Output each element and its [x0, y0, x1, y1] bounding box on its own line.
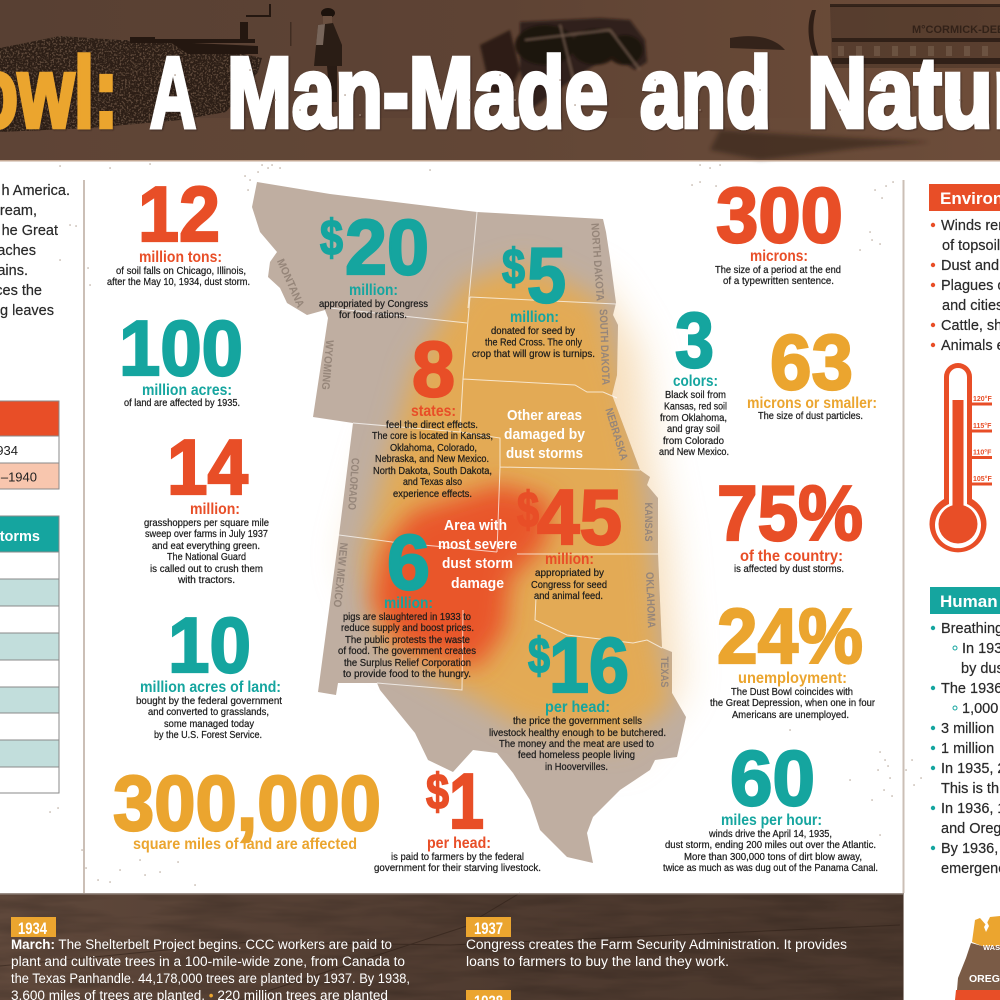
stat: 10 million acres of land: bought by the federal government: [136, 696, 282, 707]
map callout: severe area: most severe: [438, 536, 517, 553]
stat: 12 million tons: million tons:: [139, 249, 222, 266]
stat: 63 microns or smaller: microns or smaller:: [747, 395, 877, 412]
panel: human effects: 3 million: [941, 721, 994, 737]
stat: 60 miles per hour: twice as much as was dug out of the Panama Canal.: [663, 863, 878, 874]
stat: 63 microns or smaller: The size of dust particles.: [758, 411, 863, 422]
state labels: [274, 223, 670, 688]
map callout: other areas: dust storms: [506, 445, 583, 462]
stat: 14 million grasshoppers: sweep over farms in July 1937: [145, 529, 268, 540]
stat: $20 million: appropriated by Congress: [319, 299, 428, 310]
stat: 12 million tons: of soil falls on Chicago, Illinois,: [116, 266, 246, 277]
stat: $5 million: 5: [527, 231, 566, 319]
stat: 60 miles per hour: winds drive the April 14, 1935,: [708, 829, 832, 840]
timeline: 1934: [11, 917, 410, 1000]
header photo band: [0, 0, 1000, 162]
stat: 10 million acres of land: some managed today: [164, 719, 254, 730]
stat: 8 states: experience effects.: [393, 489, 472, 500]
timeline: 1937: [466, 917, 847, 969]
stat: $20 million: million:: [349, 282, 398, 299]
left intro text: ream,: [0, 203, 37, 219]
panel: environmental effects: of topsoil: [942, 238, 1000, 254]
timeline: 1934: 1934: [18, 919, 47, 938]
left intro text: he Great: [2, 223, 58, 239]
stat: 3 colors: Kansas, red soil: [664, 402, 727, 412]
stat: 75% of the country: 75%: [717, 469, 863, 557]
photo: seed drill machine: [710, 4, 1000, 160]
stat: $16 per head: [489, 621, 666, 773]
stat: 3 colors: and gray soil: [667, 424, 720, 435]
stat: $45 million: appropriated by: [535, 568, 604, 579]
map callout: other areas: damaged by: [504, 426, 586, 443]
stat: 14 million grasshoppers: 14: [167, 423, 248, 511]
table: dust storms: torms: [0, 529, 40, 545]
stat: 300,000 square miles: square miles of land are affected: [133, 836, 357, 853]
stat: 24% unemployment: 24%: [717, 592, 863, 680]
stat: $5 million: $: [502, 239, 525, 295]
stat: $16 per head: $: [528, 628, 550, 684]
stat: $5 million: the Red Cross. The only: [485, 338, 582, 348]
timeline: 1938: [466, 990, 511, 1000]
stat: 12 million tons: 12: [138, 170, 220, 258]
title: A: [150, 37, 196, 149]
stat: 3 colors: colors:: [673, 373, 718, 390]
icon: thermometer: 105°F: [973, 475, 992, 483]
map callout: other areas: Other areas: [507, 407, 582, 424]
stat: 3 colors: and New Mexico.: [659, 447, 729, 458]
stat: 6 million pigs: to provide food to the hungry.: [343, 669, 471, 680]
stat: 10 million acres of land: [136, 601, 282, 741]
map callout: severe area: damage: [451, 575, 504, 592]
stat: 300,000 square miles: 300,000: [113, 759, 381, 847]
stat: 8 states: [372, 325, 493, 500]
paper speckle texture: [50, 164, 935, 885]
stat: $1 per head: government for their starving livestock.: [374, 863, 541, 874]
icon: thermometer: 110°F: [973, 448, 992, 456]
state borders: [330, 212, 662, 690]
table: dust bowl years: –1940: [1, 470, 37, 484]
stat: $45 million: 45: [537, 473, 622, 561]
state labels: KANSAS: [642, 502, 654, 542]
stat: 300 microns: of a typewritten sentence.: [723, 276, 834, 287]
stat: 6 million pigs: the Surplus Relief Corporation: [344, 658, 471, 669]
state labels: NORTH DAKOTA: [588, 223, 606, 301]
stat: 24% unemployment: unemployment:: [738, 670, 847, 687]
timeline: 1937: Congress creates the Farm Security Administration. It provides: [466, 937, 847, 952]
stat: 6 million pigs: of food. The government creates: [338, 646, 476, 657]
table: dust storms: [0, 516, 59, 793]
panel: human effects: [930, 587, 1000, 877]
stat: 6 million pigs: million:: [384, 595, 433, 612]
stat: 8 states: The core is located in Kansas,: [372, 431, 493, 442]
panel: environmental effects: [929, 184, 1000, 354]
timeline: 1934: the Texas Panhandle. 44,178,000 trees are planted by 1937. By 1938,: [11, 971, 410, 986]
stat: 6 million pigs: pigs are slaughtered in 1933 to: [343, 612, 471, 623]
stat: $20 million: [319, 203, 429, 321]
map callout: severe area: Area with: [444, 517, 507, 534]
panel: human effects: This is th: [941, 781, 999, 797]
stat: 3 colors: 3: [675, 296, 714, 384]
stat: 6 million pigs: [338, 518, 476, 680]
stat: $20 million: for food rations.: [339, 310, 407, 321]
map: destination states: [955, 916, 1000, 1000]
stat: 24% unemployment: [710, 592, 876, 721]
stat: 14 million grasshoppers: grasshoppers per square mile: [144, 518, 269, 529]
stat: 8 states: Nebraska, and New Mexico.: [375, 454, 489, 465]
state labels: NEBRASKA: [602, 407, 630, 462]
stat: $20 million: $: [320, 210, 343, 266]
map callout: severe area: dust storm: [442, 555, 513, 572]
stat: 3 colors: Black soil from: [665, 390, 726, 401]
left intro text: [0, 183, 70, 319]
stat: 8 states: feel the direct effects.: [386, 420, 478, 431]
stat: 14 million grasshoppers: million:: [190, 501, 240, 518]
stat: 6 million pigs: The public protests the waste: [345, 635, 470, 646]
stat: 3 colors: [659, 296, 729, 458]
stat: $5 million: [472, 231, 595, 360]
stat: 63 microns or smaller: 63: [770, 318, 853, 406]
stat: 8 states: and Texas also: [403, 477, 462, 488]
stat: 12 million tons: [107, 170, 250, 288]
stat: 3 colors: from Colorado: [663, 436, 724, 447]
photo: horse team: [480, 18, 647, 110]
stat: 14 million grasshoppers: The National Guard: [167, 552, 246, 563]
stat: 300 microns: microns:: [750, 248, 808, 265]
title: Man-Made: [227, 37, 608, 149]
stat: 12 million tons: after the May 10, 1934, dust storm.: [107, 277, 250, 288]
stat: 8 states: Oklahoma, Colorado,: [390, 443, 477, 454]
left intro text: h America.: [2, 183, 70, 199]
stat: 60 miles per hour: 60: [730, 734, 815, 822]
stat: 8 states: North Dakota, South Dakota,: [373, 466, 492, 477]
stat: 14 million grasshoppers: [144, 423, 269, 586]
state labels: TEXAS: [658, 656, 670, 688]
icon: thermometer: 120°F: [973, 395, 992, 403]
map glow: other damaged areas: [362, 262, 672, 745]
state labels: OKLAHOMA: [643, 572, 657, 628]
stat: 100 million acres: of land are affected by 1935.: [124, 398, 240, 409]
stat: 300 microns: The size of a period at the end: [715, 265, 841, 276]
stat: 100 million acres: 100: [119, 304, 243, 392]
stat: 63 microns or smaller: [747, 318, 877, 422]
stat: $16 per head: feed homeless people living: [518, 750, 635, 761]
photo: farmer: [314, 8, 342, 102]
stat: 24% unemployment: The Dust Bowl coincides with: [731, 687, 853, 698]
stat: $16 per head: 16: [549, 621, 629, 709]
icon: thermometer: 115°F: [973, 422, 992, 430]
timeline: 1934: plant and cultivate trees in a 100-mile-wide zone, from Canada to: [11, 954, 405, 969]
map callout: severe area: [438, 517, 517, 592]
stat: 10 million acres of land: 10: [168, 601, 251, 689]
stat: 60 miles per hour: miles per hour:: [721, 812, 822, 829]
stat: 75% of the country: is affected by dust storms.: [734, 564, 844, 575]
timeline: 1937: 1937: [474, 919, 503, 938]
stat: 6 million pigs: 6: [387, 518, 430, 606]
stat: 60 miles per hour: dust storm, ending 200 miles out over the Atlantic.: [665, 840, 876, 851]
stat: 10 million acres of land: and converted to grasslands,: [148, 707, 269, 718]
stat: $45 million: Congress for seed: [531, 580, 607, 591]
stat: 300 microns: 300: [716, 171, 843, 259]
timeline: 1937: loans to farmers to buy the land they work.: [466, 954, 729, 969]
stat: 10 million acres of land: million acres of land:: [140, 679, 281, 696]
photo: fence post and tractor: [130, 4, 292, 54]
stat: 60 miles per hour: More than 300,000 tons of dirt blow away,: [684, 852, 862, 863]
timeline: 1934: March: The Shelterbelt Project begins. CCC workers are paid to: [11, 937, 392, 952]
state labels: SOUTH DAKOTA: [597, 309, 611, 385]
stat: 24% unemployment: the Great Depression, when one in four: [710, 698, 876, 709]
stat: $45 million: [517, 473, 622, 602]
stat: $1 per head: 1: [449, 757, 484, 845]
stat: $5 million: donated for seed by: [491, 326, 575, 337]
stat: $16 per head: in Hoovervilles.: [545, 762, 608, 773]
stat: 14 million grasshoppers: with tractors.: [177, 575, 235, 586]
stat: 14 million grasshoppers: is called out to crush them: [150, 564, 263, 575]
stat: $45 million: $: [517, 482, 539, 538]
stat: 6 million pigs: reduce supply and boost prices.: [341, 623, 474, 634]
title: [0, 37, 1000, 149]
table: dust bowl years: [0, 401, 59, 489]
state labels: COLORADO: [345, 458, 361, 511]
stat: $5 million: crop that will grow is turnips.: [472, 349, 595, 360]
stat: $16 per head: livestock healthy enough to be butchered.: [489, 728, 666, 739]
stat: $1 per head: [374, 757, 541, 874]
stat: 75% of the country: of the country:: [740, 548, 843, 565]
stat: $1 per head: per head:: [427, 835, 491, 852]
stat: $16 per head: the price the government sells: [513, 716, 642, 727]
stat: 3 colors: from Oklahoma,: [660, 413, 727, 424]
state labels: MONTANA: [274, 257, 306, 310]
timeline band: [0, 893, 904, 1000]
stat: $1 per head: $: [426, 764, 449, 820]
stat: 8 states: 8: [412, 325, 455, 413]
photo: tumbleweed drift: [0, 36, 262, 132]
panel: human effects: Human: [940, 592, 998, 611]
stat: 10 million acres of land: by the U.S. Forest Service.: [154, 730, 262, 741]
stat: $16 per head: per head:: [545, 699, 610, 716]
stat: $1 per head: is paid to farmers by the federal: [391, 852, 524, 863]
title: and: [640, 37, 771, 149]
stat: $5 million: million:: [510, 309, 559, 326]
map glow: most severe area: [372, 484, 552, 668]
stat: $16 per head: The money and the meat are used to: [499, 739, 654, 750]
stat: 24% unemployment: Americans are unemployed.: [732, 710, 849, 721]
stat: 60 miles per hour: [663, 734, 878, 874]
stat: 8 states: states:: [411, 403, 456, 420]
icon: thermometer: [930, 363, 992, 552]
left intro text: g leaves: [0, 303, 54, 319]
map callout: other areas: [504, 407, 586, 462]
stat: $45 million: million:: [545, 551, 594, 568]
stat: $45 million: and animal feed.: [534, 591, 603, 602]
stat: 100 million acres: million acres:: [142, 382, 232, 399]
stat: 14 million grasshoppers: and eat everything green.: [152, 541, 260, 552]
map: dust bowl region: [252, 182, 686, 863]
state labels: NEW MEXICO: [331, 542, 349, 608]
stat: $20 million: 20: [345, 203, 429, 291]
state labels: WYOMING: [319, 339, 335, 390]
panel: environmental effects: Dust and: [941, 258, 999, 274]
panel: human effects: 1 million: [941, 741, 994, 757]
